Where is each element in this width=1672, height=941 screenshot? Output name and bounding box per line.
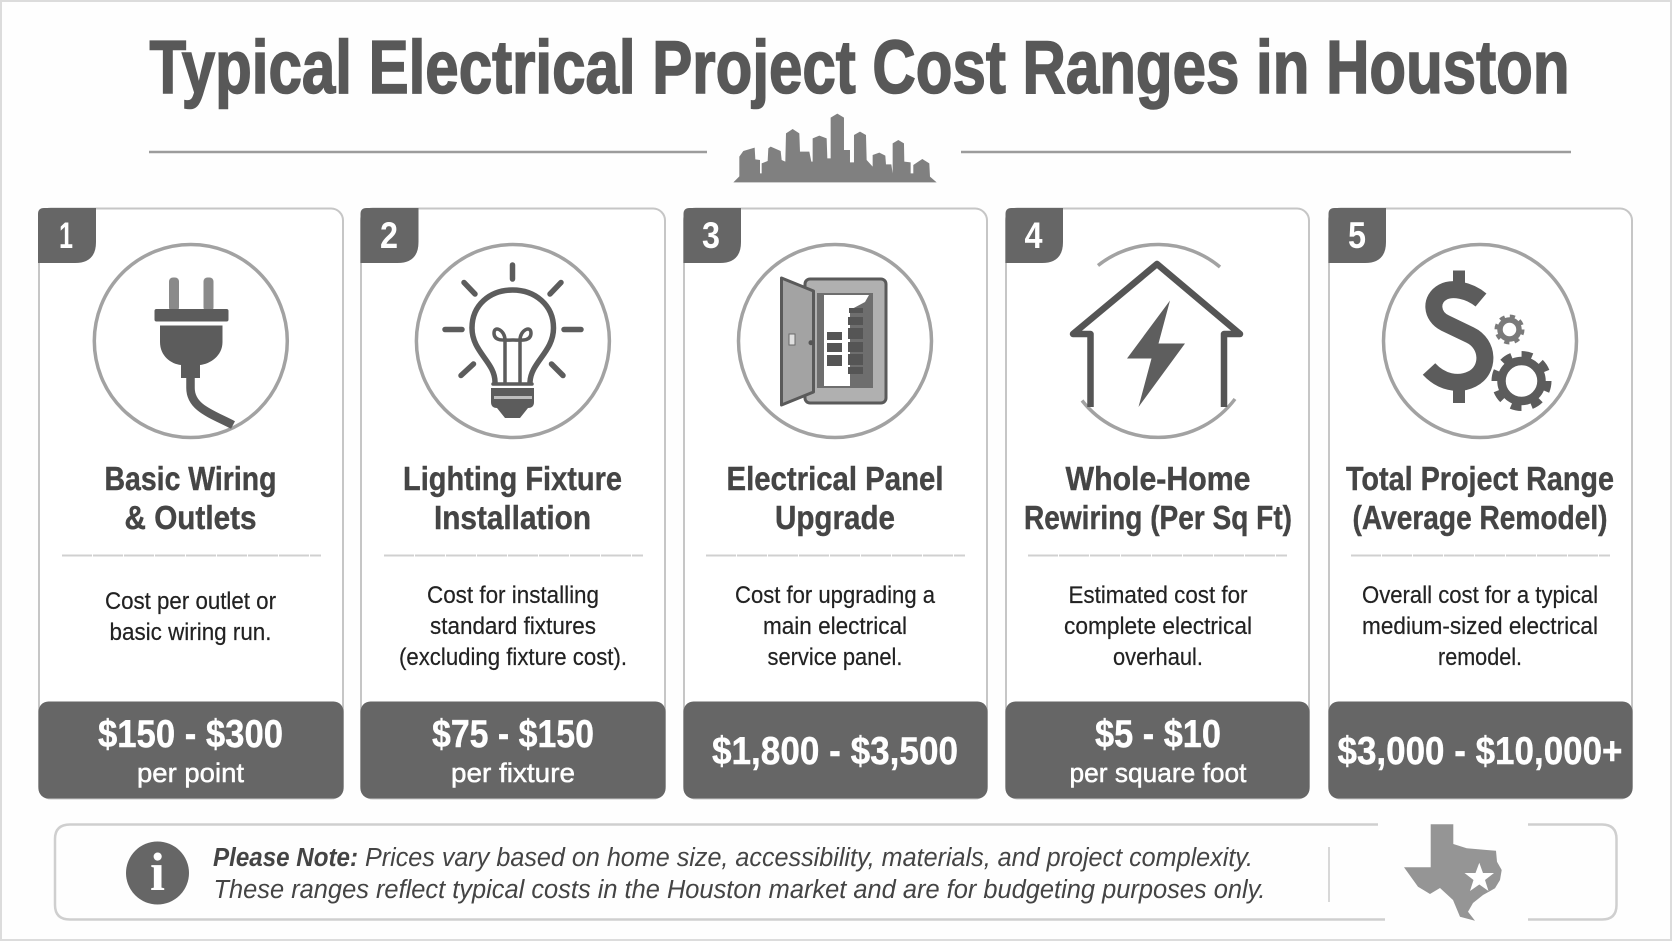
price band: $75 - $150 — [432, 713, 594, 756]
card description: main electrical — [763, 613, 907, 640]
panel: whole-home rewiring — [1006, 208, 1310, 798]
card description: medium-sized electrical — [1362, 613, 1598, 640]
card title: Rewiring (Per Sq Ft) — [1024, 499, 1292, 536]
header divider with skyline — [149, 114, 1571, 182]
panel: basic wiring and outlets — [38, 208, 344, 798]
card description: Cost for installing — [427, 582, 599, 609]
icon: light bulb — [416, 244, 609, 438]
card title: (Average Remodel) — [1352, 499, 1608, 536]
card title — [1024, 460, 1292, 536]
note text — [213, 844, 1266, 904]
icon: electrical panel — [738, 244, 932, 438]
icon: info: i — [150, 842, 165, 902]
number badge 3: 3 — [702, 215, 720, 256]
icon: house with lightning bolt — [1073, 245, 1240, 437]
number badge 3 — [684, 208, 741, 263]
number badge 4: 4 — [1024, 215, 1043, 256]
number badge 1: 1 — [59, 215, 73, 256]
price band: per square foot — [1070, 758, 1247, 788]
price band: $150 - $300 — [98, 713, 283, 756]
card description — [1362, 582, 1598, 671]
number badge 4 — [1006, 208, 1063, 263]
panel: total project range — [1328, 208, 1632, 798]
card title: & Outlets — [124, 499, 256, 536]
icon: info — [126, 842, 189, 904]
price band: $3,000 - $10,000+ — [1338, 730, 1622, 773]
card description: remodel. — [1438, 644, 1522, 671]
card description: Estimated cost for — [1068, 582, 1248, 609]
price band — [684, 702, 988, 798]
card description — [735, 582, 936, 671]
card title: Basic Wiring — [104, 460, 276, 497]
price band: per point — [137, 758, 245, 788]
note text: These ranges reflect typical costs in the Houston market and are for budgeting purposes only. — [214, 876, 1266, 904]
card title — [104, 460, 276, 536]
card title: Total Project Range — [1346, 460, 1614, 497]
price band: $1,800 - $3,500 — [712, 730, 958, 773]
card title: Electrical Panel — [726, 460, 944, 497]
icon: dollar sign with gears — [1384, 244, 1576, 438]
note text: Please Note: — [213, 844, 358, 872]
number badge 2: 2 — [380, 215, 398, 256]
card title: Installation — [434, 499, 591, 536]
card description: service panel. — [768, 644, 902, 671]
card title — [726, 460, 944, 536]
card title — [1346, 460, 1614, 536]
note text: Prices vary based on home size, accessibility, materials, and project complexity. — [365, 844, 1253, 872]
card description: Cost for upgrading a — [735, 582, 936, 609]
card description: complete electrical — [1064, 613, 1252, 640]
card description: basic wiring run. — [110, 619, 272, 646]
card description: overhaul. — [1113, 644, 1203, 671]
card description: standard fixtures — [430, 613, 596, 640]
card description — [105, 588, 276, 646]
card title: Whole-Home — [1066, 460, 1250, 497]
icon: Texas map with star — [1404, 824, 1502, 921]
number badge 1 — [38, 208, 96, 263]
card description — [1064, 582, 1252, 671]
price band: $5 - $10 — [1095, 713, 1221, 756]
price band — [38, 702, 344, 798]
card description: Overall cost for a typical — [1362, 582, 1598, 609]
card description: Cost per outlet or — [105, 588, 276, 615]
price band — [1006, 702, 1310, 798]
card title: Lighting Fixture — [403, 460, 622, 497]
price band — [360, 702, 666, 798]
card description: (excluding fixture cost). — [399, 644, 627, 671]
card title: Upgrade — [775, 499, 895, 536]
icon: Houston skyline — [733, 114, 937, 182]
panel: lighting fixture installation — [360, 208, 666, 798]
price band: per fixture — [451, 758, 575, 788]
icon: plug — [94, 244, 287, 438]
card title — [403, 460, 622, 536]
number badge 5: 5 — [1348, 215, 1366, 256]
panel: electrical panel upgrade — [684, 208, 988, 798]
number badge 5 — [1328, 208, 1386, 263]
panel: note — [55, 824, 1616, 921]
number badge 2 — [360, 208, 418, 263]
price band — [1328, 702, 1632, 798]
card description — [399, 582, 627, 671]
